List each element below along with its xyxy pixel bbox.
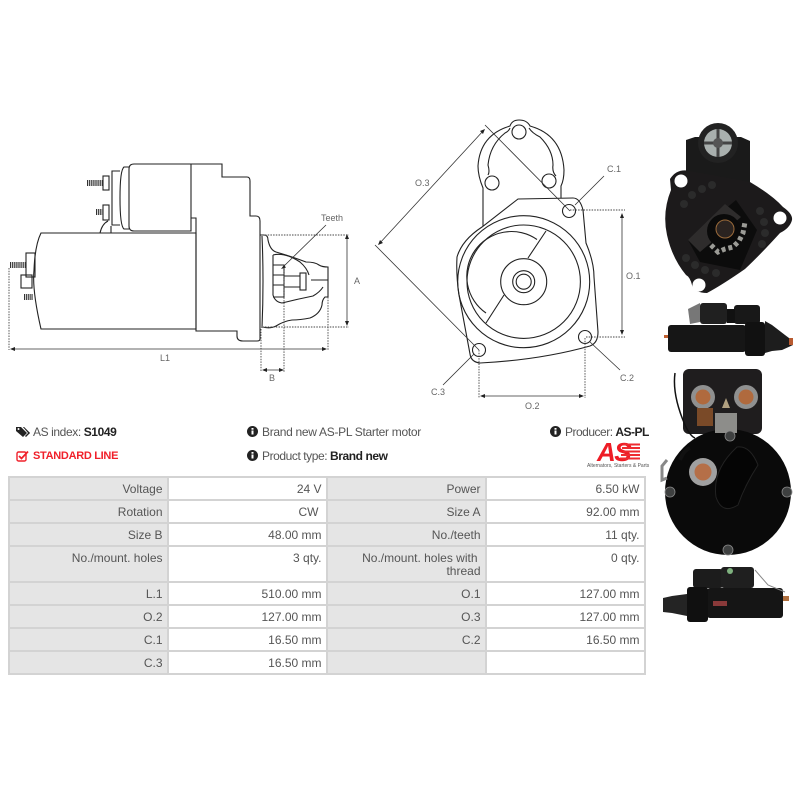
specification table: O.3: [461, 610, 480, 624]
specification table: 11 qty.: [605, 528, 640, 542]
specification table: C.3: [144, 656, 162, 670]
icon: info: [247, 450, 258, 461]
flange circles: [458, 216, 590, 348]
specification table: 24 V: [297, 482, 322, 496]
mounting flange: [457, 198, 598, 363]
photo: front with pinion: [665, 123, 792, 293]
specification table: [8, 476, 646, 675]
specification table: CW: [298, 505, 318, 519]
specification table: C.2: [462, 633, 480, 647]
dimension L1: [9, 268, 328, 363]
photo: rear view with solenoid box: [662, 369, 792, 555]
specification table: Voltage: [122, 482, 162, 496]
specification table: 127.00 mm: [579, 587, 640, 601]
callouts C.1 C.2 C.3: C.1: [607, 164, 621, 174]
specification table: L.1: [146, 587, 162, 601]
specification table: O.2: [143, 610, 162, 624]
specification table: 510.00 mm: [261, 587, 322, 601]
specification table: 6.50 kW: [595, 482, 640, 496]
icon: tags: [16, 427, 30, 437]
teeth callout: [281, 213, 343, 269]
mounting holes: [472, 204, 592, 356]
dimension B: [261, 265, 284, 383]
specification table: 48.00 mm: [268, 528, 322, 542]
dimension O.1: O.1: [626, 271, 641, 281]
specification table: thread: [446, 564, 480, 578]
icon: info: [550, 426, 561, 437]
logo: AS: [587, 437, 650, 469]
specification table: 127.00 mm: [261, 610, 322, 624]
logo tagline: Alternators, Starters & Parts: [587, 463, 649, 469]
motor body: [34, 233, 196, 329]
callouts C.1 C.2 C.3: C.3: [431, 387, 445, 397]
front view technical drawing: [374, 120, 641, 410]
dimension L1: L1: [160, 353, 170, 363]
icon: info: [247, 426, 258, 437]
solenoid: [100, 164, 191, 233]
dimension A: [265, 234, 360, 327]
info: brand new: Brand new AS-PL Starter motor: [262, 425, 421, 439]
specification table: Size A: [446, 505, 480, 519]
photo: side view: [664, 303, 793, 356]
solenoid terminals: [87, 176, 109, 220]
specification table: O.1: [461, 587, 480, 601]
dimension A: A: [354, 276, 360, 286]
specification table: Size B: [128, 528, 162, 542]
callouts C.1 C.2 C.3: [431, 164, 634, 397]
logo letters: AS: [597, 437, 630, 467]
nose: [260, 235, 328, 328]
specification table: 3 qty.: [293, 551, 322, 565]
specification table: Power: [446, 482, 480, 496]
specification table: C.1: [144, 633, 162, 647]
dimension B: B: [269, 373, 275, 383]
specification table: No./mount. holes with: [362, 551, 478, 565]
rear plate: [478, 120, 564, 226]
dimension O.2: [479, 338, 585, 411]
specification table: 16.50 mm: [586, 633, 640, 647]
specification table: 16.50 mm: [268, 633, 322, 647]
specification table: 16.50 mm: [268, 656, 322, 670]
teeth callout: Teeth: [321, 213, 343, 223]
specification table: 0 qty.: [611, 551, 640, 565]
dimension O.3: [375, 125, 570, 350]
specification table: No./teeth: [432, 528, 480, 542]
logo stripes: [620, 444, 640, 460]
specification table: 127.00 mm: [579, 610, 640, 624]
info: producer: Producer: AS-PL: [565, 425, 649, 439]
callouts C.1 C.2 C.3: C.2: [620, 373, 634, 383]
icon: checked box: [16, 450, 29, 462]
info: product type: Product type: Brand new: [262, 449, 388, 463]
specification table: No./mount. holes: [72, 551, 162, 565]
specification table: Rotation: [118, 505, 162, 519]
dimension O.1: [570, 210, 641, 337]
photo: opposite side view: [663, 567, 789, 622]
product photos: [660, 123, 793, 622]
side view technical drawing: [8, 164, 360, 383]
rear terminals: [10, 253, 35, 297]
dimension O.3: O.3: [415, 178, 430, 188]
info row: standard line: STANDARD LINE: [33, 450, 118, 462]
specification table: 92.00 mm: [586, 505, 640, 519]
drive housing: [191, 164, 260, 341]
info row: AS index: AS index: S1049: [33, 425, 116, 439]
